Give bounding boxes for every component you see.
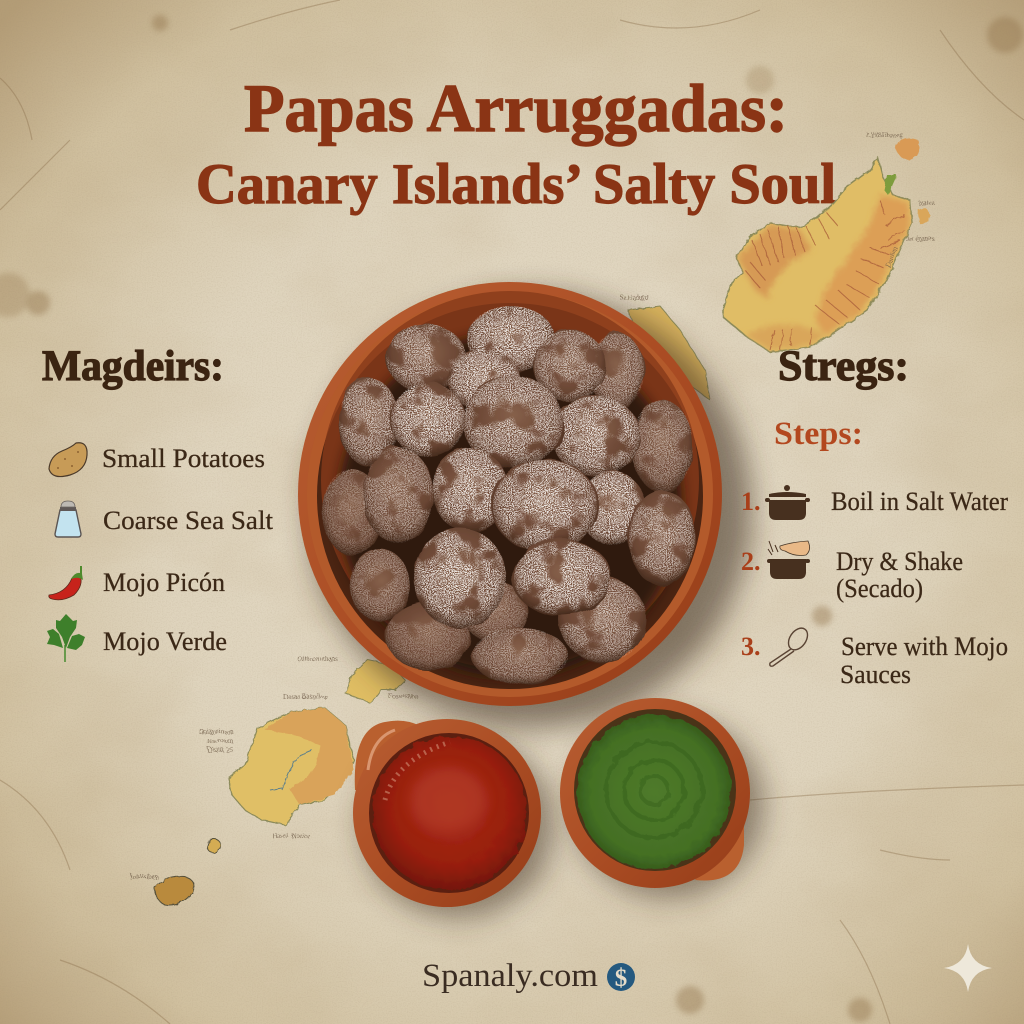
map: lower islands: Dosaa Basnflon (283, 693, 328, 701)
icon: chili (49, 566, 83, 600)
map: lower islands: Hasen Notior (272, 832, 310, 840)
step 1 text: Boil in Salt Water (831, 487, 1008, 516)
step 2 text: Dry & Shake (836, 547, 963, 576)
map: small island behind bowl: St.Hadurd (620, 294, 649, 302)
map: lower islands: Fossusnon (388, 692, 418, 700)
ingredient: coarse sea salt: Coarse Sea Salt (103, 506, 274, 535)
step 3 text: Serve with Mojo (841, 632, 1008, 661)
map: large island (723, 131, 936, 352)
ingredient: small potatoes: Small Potatoes (102, 444, 265, 473)
step 2 text: (Secado) (836, 574, 923, 603)
title: Papas Arruggadas: (244, 70, 788, 146)
icon: parsley (47, 614, 85, 662)
step 2 number: 2. (741, 547, 760, 576)
green mojo bowl (560, 698, 764, 898)
steps subheading: Steps: (774, 416, 863, 452)
map: lower islands (130, 655, 418, 905)
panel: ingredients (42, 343, 274, 662)
step 2 text (836, 547, 963, 603)
icon: brand logo: $ (615, 965, 627, 992)
icon: sparkle (944, 944, 992, 992)
ingredient: mojo verde: Mojo Verde (103, 627, 227, 656)
map: large island: Jet énanes (906, 235, 935, 243)
icon: pot with hand shaking (767, 541, 810, 579)
footer brand: Spanaly.com (422, 958, 598, 994)
step 3 number: 3. (741, 632, 760, 661)
steps heading: Stregs: (778, 343, 909, 390)
icon: salt shaker (55, 501, 81, 537)
step 3 text: Sauces (840, 660, 911, 689)
ingredients heading: Magdeirs: (42, 343, 224, 390)
map: large island: Daunan (884, 245, 899, 269)
ingredient: mojo picon: Mojo Picón (103, 568, 225, 597)
map: lower islands: Dalaunimon (199, 728, 234, 736)
step 1 number: 1. (741, 487, 760, 516)
map: lower islands: Cuttonnuthans (297, 655, 338, 663)
map: lower islands: Jublisiben (130, 873, 159, 881)
map: lower islands: Ieseroum (207, 737, 234, 745)
shadow: main bowl (308, 292, 752, 728)
potatoes (322, 306, 696, 684)
icon: brand logo (607, 963, 635, 992)
icon: spoon (770, 625, 811, 666)
map: large island: lualen (918, 199, 936, 207)
step 3 text (840, 632, 1008, 689)
map: large island: Llhuslibanog (866, 131, 903, 139)
main terracotta bowl with potatoes (298, 282, 722, 706)
icon: potato (49, 443, 87, 477)
icon: pot (765, 485, 810, 520)
panel: steps (741, 343, 1008, 689)
title (196, 70, 836, 216)
red mojo bowl (353, 719, 554, 918)
map: lower islands: Dhaut 25 (207, 746, 233, 754)
bowl rim (298, 282, 722, 706)
map: small island behind bowl (620, 294, 710, 400)
title: Canary Islands’ Salty Soul (196, 153, 836, 216)
